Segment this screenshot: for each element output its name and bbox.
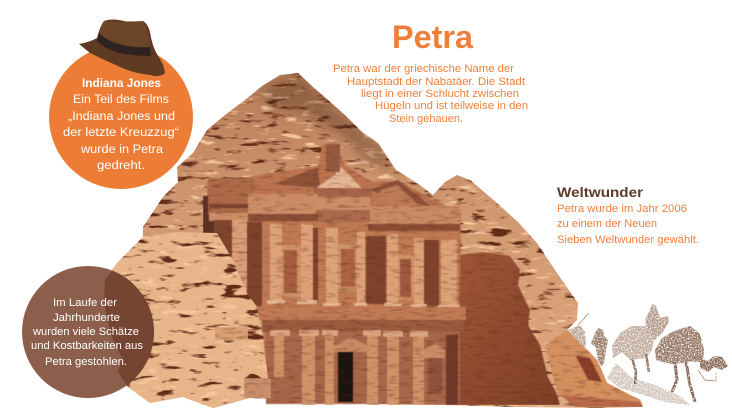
lower storey wall (266, 332, 460, 404)
intro paragraph (333, 63, 528, 125)
circle text (31, 297, 144, 368)
intro paragraph: Petra war der griechische Name der (333, 63, 514, 75)
intro paragraph: Stein gehauen. (389, 113, 463, 125)
circle text: Indiana Jones (82, 78, 161, 90)
circle text: „Indiana Jones und (68, 111, 175, 123)
staff (578, 313, 589, 325)
callout text: zu einem der Neuen (557, 218, 657, 230)
walking figure (591, 328, 608, 366)
upper entablature (248, 194, 460, 231)
circle text: Petra gestohlen. (45, 356, 127, 368)
pediment infill (372, 185, 418, 205)
circle text: Im Laufe der (53, 297, 117, 309)
intro paragraph: Hauptstadt der Nabatäer. Die Stadt (347, 76, 525, 88)
circle text: gedreht. (97, 160, 145, 172)
callout text: Sieben Weltwunder gewählt. (557, 234, 699, 246)
lower entablature (252, 307, 466, 332)
upper windows (282, 244, 414, 300)
right niche (424, 343, 445, 394)
middle camel legs (632, 354, 649, 384)
circle text: wurden viele Schätze (32, 326, 139, 338)
middle camel body (612, 326, 654, 360)
dark right edge (446, 335, 458, 405)
central tholos (314, 144, 372, 210)
intro paragraph: liegt in einer Schlucht zwischen (361, 88, 519, 100)
circle: Indiana Jones (49, 45, 193, 189)
stone niche in left rock (215, 327, 248, 340)
circle text: der letzte Kreuzzug“ (63, 127, 179, 139)
camel rider (645, 304, 669, 340)
door pediment (333, 337, 369, 352)
ground shadow (607, 363, 690, 405)
circle text: und Kostbarkeiten aus (31, 340, 144, 352)
circle text: Ein Teil des Films (73, 94, 169, 106)
intro paragraph: Hügeln und ist teilweise in den (375, 100, 528, 112)
temple facade (203, 142, 466, 405)
icon: fedora hat (79, 20, 165, 76)
front camel body (655, 326, 704, 364)
shadow behind upper colonnade (247, 222, 439, 306)
column bases (267, 300, 460, 308)
rock seen through circle (104, 270, 154, 386)
circle text: wurde in Petra (80, 144, 164, 156)
front camel legs (672, 362, 695, 402)
upper storey recess (247, 222, 459, 306)
callout text: Petra wurde im Jahr 2006 (557, 203, 687, 215)
stone block near temple foot (244, 378, 271, 398)
front camel neck and head (700, 356, 728, 372)
rock tip over sketch (545, 330, 643, 407)
title: Petra (392, 19, 473, 55)
rocks left of temple (104, 232, 270, 408)
lower columns (274, 335, 424, 405)
callout heading: Weltwunder (557, 185, 644, 200)
circle text (63, 78, 179, 172)
facade body (207, 142, 461, 405)
right pediment (368, 180, 433, 208)
camel neck rein (698, 370, 716, 381)
left pediment (274, 167, 320, 188)
doorway (338, 352, 353, 402)
circle text: Jahrhunderte (53, 312, 120, 324)
camel caravan sketch (566, 304, 728, 405)
callout text (557, 203, 699, 246)
dark upper ridge shading (262, 74, 396, 170)
sheer red cliff wall (458, 252, 560, 405)
upper columns (270, 224, 457, 306)
rock massif (104, 73, 643, 408)
left pillar block (203, 178, 254, 294)
rear camel (566, 325, 586, 355)
circle: theft (22, 266, 154, 398)
callout: Weltwunder (557, 185, 699, 246)
column capitals (270, 330, 428, 337)
